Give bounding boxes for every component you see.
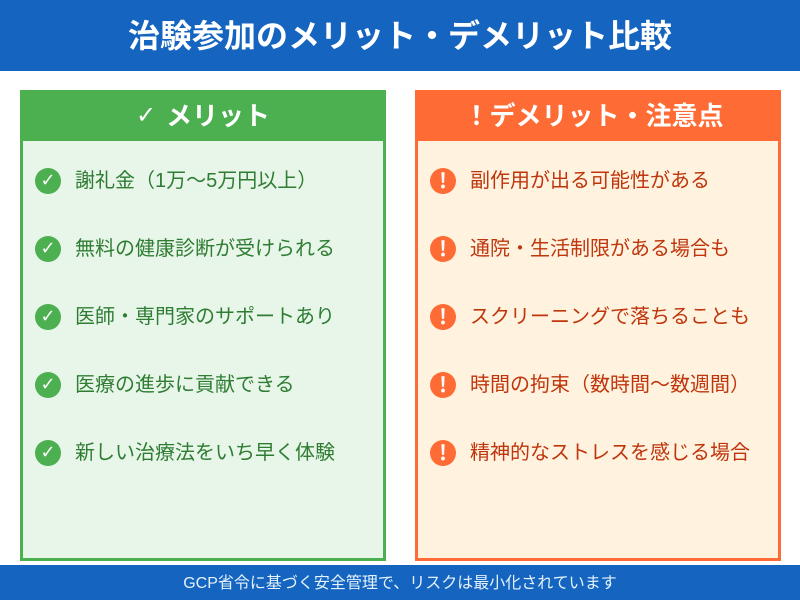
icon: exclamation xyxy=(430,304,456,330)
item: early access xyxy=(35,440,335,466)
icon: heading check: ✓ xyxy=(136,101,156,129)
icon: exclamation xyxy=(430,440,456,466)
text: heading merits: メリット xyxy=(166,101,270,131)
text: mental stress: 精神的なストレスを感じる場合 xyxy=(470,442,750,464)
item: medical progress xyxy=(35,372,295,398)
icon: check xyxy=(35,372,61,398)
panel: demerits xyxy=(415,90,781,561)
item: free health checkup xyxy=(35,236,335,262)
icon: check xyxy=(35,304,61,330)
item: time commitment xyxy=(430,369,750,399)
title: 治験参加のメリット・デメリット比較 xyxy=(128,18,672,54)
text: early access: 新しい治療法をいち早く体験 xyxy=(75,442,335,464)
text: side effects: 副作用が出る可能性がある xyxy=(470,170,710,192)
icon: check xyxy=(35,440,61,466)
icon: check xyxy=(35,168,61,194)
title xyxy=(0,0,800,71)
text: honorarium: 謝礼金（1万〜5万円以上） xyxy=(75,170,317,192)
item: side effects xyxy=(430,165,710,195)
icon: check: ✓ xyxy=(40,374,56,395)
icon: check: ✓ xyxy=(40,170,56,191)
text: visits and restrictions: 通院・生活制限がある場合も xyxy=(470,238,730,260)
icon: exclamation: ! xyxy=(439,369,447,399)
icon: exclamation xyxy=(430,168,456,194)
icon: exclamation: ! xyxy=(439,437,447,467)
item: honorarium xyxy=(35,168,317,194)
icon: exclamation: ! xyxy=(439,165,447,195)
panel: merits xyxy=(20,90,386,561)
item: screening failure xyxy=(430,301,750,331)
item: doctor support xyxy=(35,304,335,330)
text: screening failure: スクリーニングで落ちることも xyxy=(470,306,750,328)
icon: check: ✓ xyxy=(40,238,56,259)
icon: exclamation: ! xyxy=(439,301,447,331)
text: free health checkup: 無料の健康診断が受けられる xyxy=(75,238,335,260)
heading: merits xyxy=(20,90,386,141)
icon: exclamation xyxy=(430,372,456,398)
text: time commitment: 時間の拘束（数時間〜数週間） xyxy=(470,374,750,396)
item: visits and restrictions xyxy=(430,233,730,263)
icon: check xyxy=(35,236,61,262)
icon: exclamation: ! xyxy=(439,233,447,263)
icon: check: ✓ xyxy=(40,306,56,327)
icon: check: ✓ xyxy=(40,442,56,463)
heading: demerits: ！デメリット・注意点 xyxy=(463,101,724,131)
heading: demerits xyxy=(415,90,781,141)
footer note xyxy=(0,565,800,600)
icon: exclamation xyxy=(430,236,456,262)
footer note: GCP省令に基づく安全管理で、リスクは最小化されています xyxy=(183,575,617,592)
text: doctor support: 医師・専門家のサポートあり xyxy=(75,306,335,328)
item: mental stress xyxy=(430,437,750,467)
text: medical progress: 医療の進歩に貢献できる xyxy=(75,374,295,396)
